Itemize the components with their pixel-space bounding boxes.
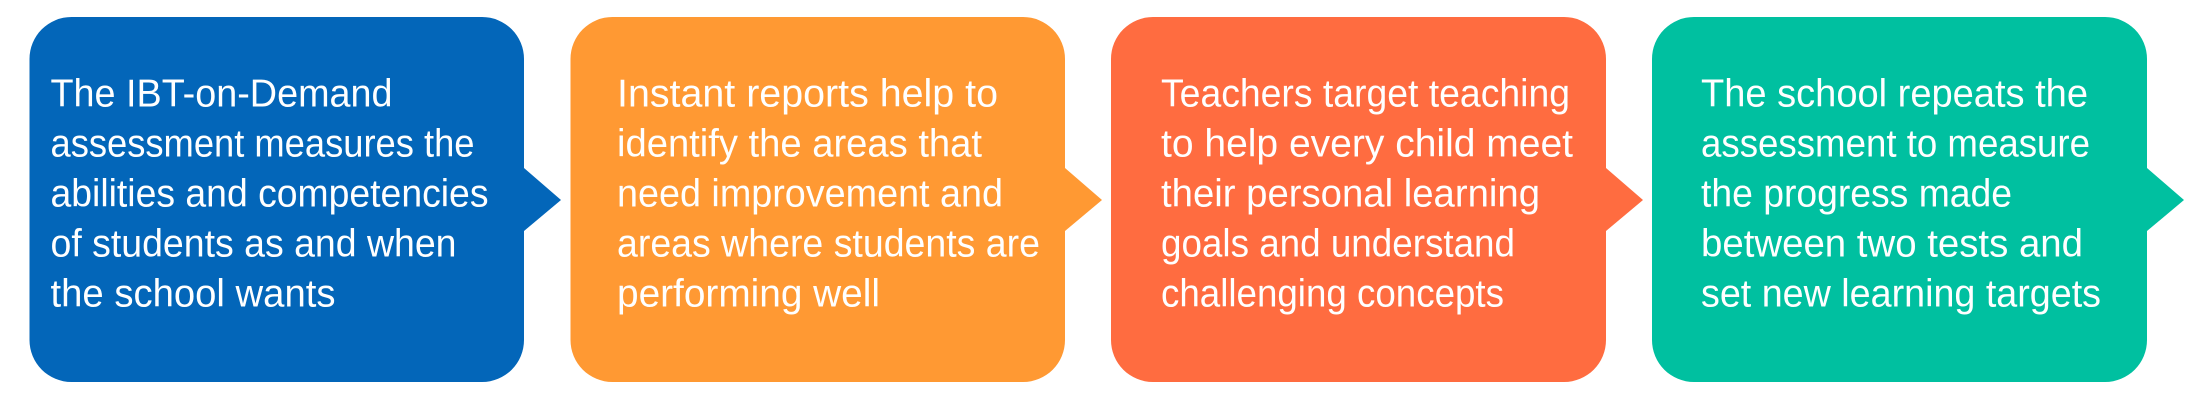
callout shape: green box with arrow bbox=[1652, 17, 2184, 382]
text block: step 1: abilities and competencies bbox=[50, 172, 488, 216]
panel: step 2 instant reports bbox=[570, 17, 1102, 382]
text block: step 4: The school repeats the bbox=[1701, 72, 2088, 116]
panel: step 1 assessment bbox=[30, 17, 561, 382]
text block: step 2 bbox=[617, 72, 1040, 316]
text block: step 4: the progress made bbox=[1701, 172, 2012, 216]
text block: step 2: identify the areas that bbox=[617, 122, 982, 166]
text block: step 1 bbox=[50, 72, 488, 316]
callout shape: red-orange box with arrow bbox=[1111, 17, 1643, 382]
text block: step 1: The IBT-on-Demand bbox=[50, 72, 392, 116]
text block: step 3: to help every child meet bbox=[1161, 122, 1573, 166]
text block: step 2: areas where students are bbox=[617, 222, 1040, 266]
panel: step 3 targeted teaching bbox=[1111, 17, 1643, 382]
panel: step 4 repeat assessment bbox=[1652, 17, 2184, 382]
text block: step 3: goals and understand bbox=[1161, 222, 1515, 266]
text block: step 1: the school wants bbox=[50, 272, 336, 316]
text block: step 3: Teachers target teaching bbox=[1161, 72, 1570, 116]
text block: step 4: set new learning targets bbox=[1701, 272, 2101, 316]
callout shape: blue box with arrow bbox=[30, 17, 561, 382]
text block: step 4 bbox=[1701, 72, 2101, 316]
text block: step 4: assessment to measure bbox=[1701, 122, 2090, 166]
callout shape: orange box with arrow bbox=[570, 17, 1102, 382]
text block: step 3: their personal learning bbox=[1161, 172, 1540, 216]
text block: step 3: challenging concepts bbox=[1161, 272, 1504, 316]
text block: step 2: performing well bbox=[617, 272, 880, 316]
text block: step 4: between two tests and bbox=[1701, 222, 2083, 266]
text block: step 3 bbox=[1161, 72, 1573, 316]
text block: step 2: need improvement and bbox=[617, 172, 1003, 216]
text block: step 1: of students as and when bbox=[50, 222, 456, 266]
text block: step 1: assessment measures the bbox=[50, 122, 474, 166]
text block: step 2: Instant reports help to bbox=[617, 72, 998, 116]
